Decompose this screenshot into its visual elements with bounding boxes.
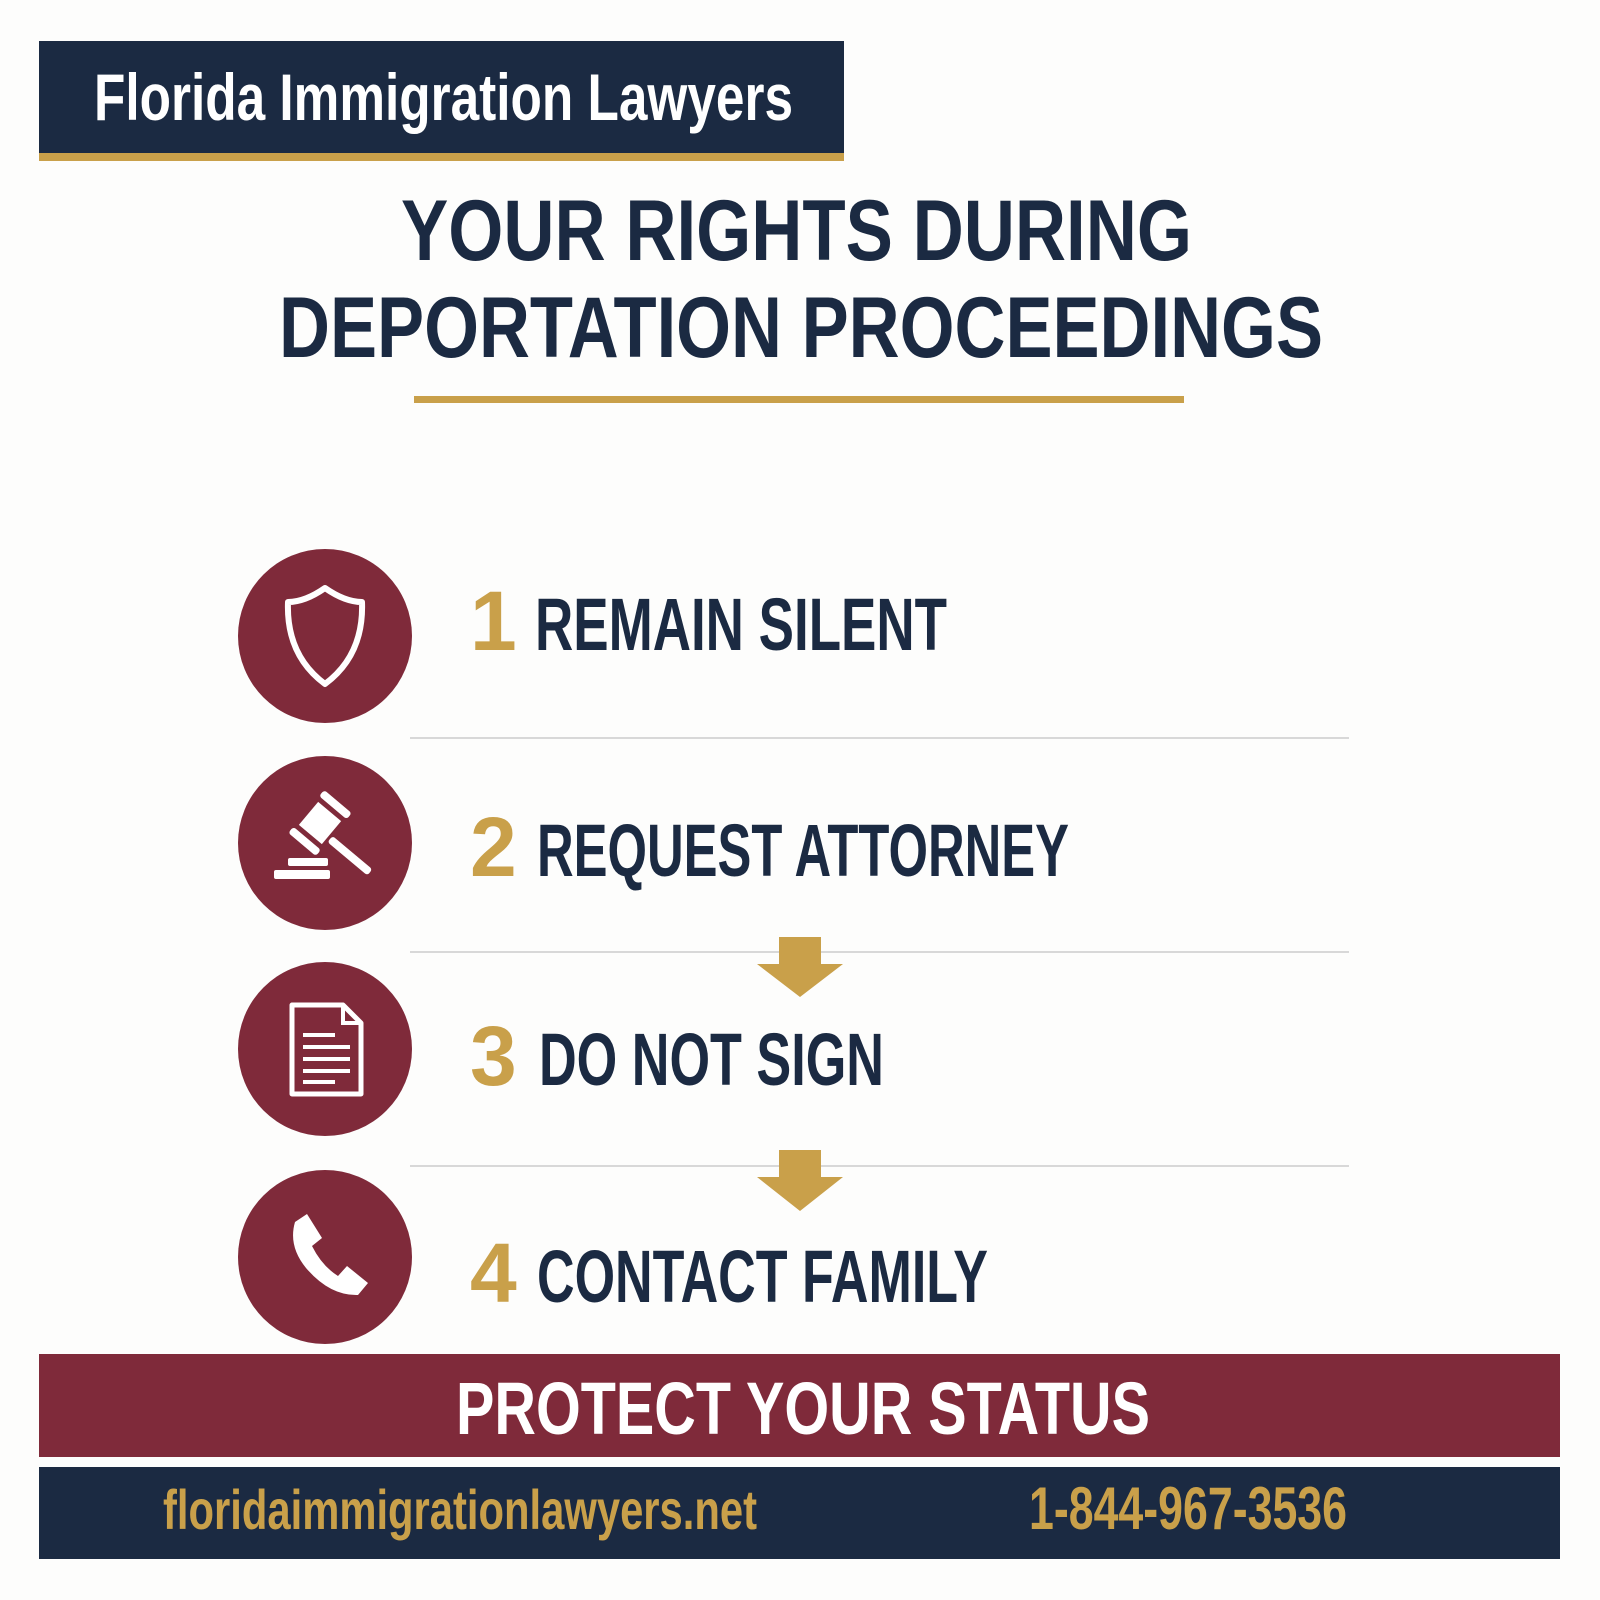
item 2: request attorney: 2 xyxy=(470,800,517,894)
icon: gavel xyxy=(238,756,412,930)
website: floridaimmigrationlawyers.net xyxy=(163,1478,757,1541)
arrow 2 xyxy=(757,1150,843,1211)
item 3: do not sign: 3 xyxy=(470,1009,517,1103)
item 2: request attorney: REQUEST ATTORNEY xyxy=(537,809,1069,892)
footer bar xyxy=(39,1467,1560,1559)
item 1: remain silent: REMAIN SILENT xyxy=(535,583,947,666)
item 4: contact family xyxy=(238,1170,988,1344)
title: DEPORTATION PROCEEDINGS xyxy=(279,280,1323,376)
arrow 1 xyxy=(757,937,843,997)
icon: document xyxy=(238,962,412,1136)
title: YOUR RIGHTS DURING xyxy=(401,183,1192,279)
banner: protect your status xyxy=(39,1354,1560,1457)
banner: protect your status: PROTECT YOUR STATUS xyxy=(456,1367,1150,1450)
item 1: remain silent: 1 xyxy=(470,574,517,668)
title xyxy=(279,183,1323,376)
item 4: contact family: 4 xyxy=(470,1226,517,1320)
header bar xyxy=(39,41,844,161)
icon: shield xyxy=(238,549,412,723)
item 3: do not sign: DO NOT SIGN xyxy=(539,1018,884,1101)
item 4: contact family: CONTACT FAMILY xyxy=(537,1235,988,1318)
title underline xyxy=(414,396,1184,403)
item 3: do not sign xyxy=(238,962,884,1136)
icon: phone xyxy=(238,1170,412,1344)
header text: Florida Immigration Lawyers xyxy=(94,60,793,134)
phone number: 1-844-967-3536 xyxy=(1029,1475,1347,1542)
item 1: remain silent xyxy=(238,549,947,723)
item 2: request attorney xyxy=(238,756,1069,930)
dividers xyxy=(410,738,1349,1166)
